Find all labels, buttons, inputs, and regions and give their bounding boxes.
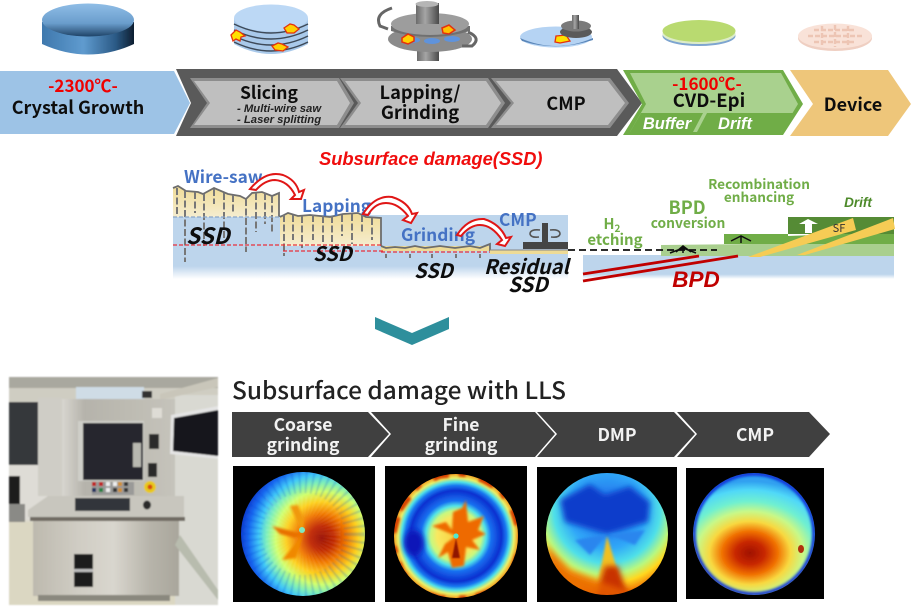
dark green drift (788, 217, 894, 234)
icons: dislocation arrows (670, 236, 751, 253)
stacking fault wedges: SF (833, 220, 845, 236)
wire-saw damage layer (173, 186, 279, 262)
LLS process chevrons (232, 412, 830, 457)
step: crystal growth: Crystal Growth (12, 94, 144, 120)
step: CMP (677, 412, 830, 457)
step: fine grinding: grinding (425, 432, 498, 457)
icon: up arrow (799, 219, 818, 233)
step: slicing: - Multi-wire saw (237, 103, 322, 115)
heading: subsurface damage with LLS: Subsurface damage with LLS (232, 372, 566, 406)
icon: crystal boule (42, 4, 134, 54)
step: crystal growth: -2300℃- (48, 72, 118, 97)
diagram: subsurface damage cross-section (173, 148, 571, 298)
substrate base (173, 215, 568, 279)
step: lapping and grinding: Lapping/ (380, 79, 460, 105)
SSD labels: Residual (484, 251, 571, 280)
process labels: Lapping (302, 192, 372, 217)
label: BPD: BPD (672, 267, 720, 292)
icon: epitaxial wafer (662, 20, 736, 46)
step: CMP: CMP (736, 422, 774, 447)
etch reference dashed line (568, 249, 717, 251)
arrows between processes (250, 174, 511, 246)
grinding damage layer (381, 244, 490, 258)
step: device: Device (824, 91, 882, 117)
step: slicing (190, 78, 354, 128)
step: CVD epitaxy: Buffer (643, 115, 693, 133)
icon: device wafer (798, 24, 872, 51)
step: CVD epitaxy: Drift (718, 115, 753, 133)
heading: subsurface damage: Subsurface damage(SSD) (319, 148, 542, 169)
heat map: CMP (686, 468, 824, 599)
heat map: coarse grinding (233, 466, 375, 602)
process labels: Grinding (401, 221, 476, 246)
blue substrate (583, 255, 894, 279)
step: lapping and grinding (340, 78, 505, 128)
diagram: epitaxial layer cross-section: conversion (651, 212, 725, 232)
step: DMP (537, 412, 695, 457)
process flow bar (0, 69, 911, 136)
process labels: CMP (499, 206, 537, 231)
CMP residual layer (490, 250, 568, 254)
label: etching: H (604, 213, 615, 234)
label: etching: 2 (615, 220, 621, 235)
step: crystal growth (0, 71, 190, 134)
step: coarse grinding (232, 412, 389, 457)
heat map: fine grinding (385, 466, 527, 602)
label: recombination enhancing: Recombination (708, 173, 810, 193)
step: CVD epitaxy (623, 70, 803, 135)
SSD labels (186, 219, 571, 298)
step: slicing: Slicing (240, 80, 299, 105)
damage depth lines (173, 217, 490, 252)
equipment photo (9, 377, 218, 605)
light green buffer (661, 243, 894, 256)
step: CVD epitaxy: -1600℃- (672, 70, 742, 95)
step: device (790, 70, 911, 136)
SSD labels: SSD (186, 219, 233, 251)
step: coarse grinding: Coarse (274, 412, 332, 437)
step: lapping and grinding: Grinding (381, 99, 459, 125)
step: fine grinding (371, 412, 555, 457)
process labels: Wire-saw (184, 163, 263, 188)
step: coarse grinding: grinding (267, 432, 340, 457)
icon: lapping machine (378, 1, 476, 61)
label: drift: Drift (844, 195, 872, 210)
diagram: epitaxial layer cross-section: enhancing (724, 186, 794, 206)
SSD labels: SSD (508, 268, 550, 298)
heat map: DMP (537, 467, 677, 602)
step: CVD epitaxy: CVD-Epi (673, 87, 745, 113)
SSD labels: SSD (313, 238, 355, 267)
process labels (184, 163, 537, 246)
arrow: teal chevron (375, 317, 449, 345)
lapping damage layer (280, 213, 381, 256)
step: fine grinding: Fine (443, 412, 479, 437)
top wafer icons row (42, 1, 872, 61)
medium green layer (724, 232, 894, 244)
label: BPD conversion: BPD (668, 194, 706, 220)
step: slicing: - Laser splitting (237, 114, 321, 126)
step: DMP: DMP (597, 422, 637, 447)
SSD labels: SSD (414, 255, 456, 284)
BPD lines (583, 256, 738, 281)
panel: wafering steps (176, 69, 642, 136)
stacking fault wedges (748, 218, 895, 257)
diagram: epitaxial layer cross-section (568, 173, 895, 292)
icon: CMP polisher (520, 15, 593, 48)
icon: sliced wafers (231, 4, 308, 54)
icon: CMP head (523, 223, 568, 249)
step: CMP: CMP (546, 90, 586, 116)
diagram: epitaxial layer cross-section: etching (587, 229, 643, 250)
step: CMP (491, 78, 629, 128)
